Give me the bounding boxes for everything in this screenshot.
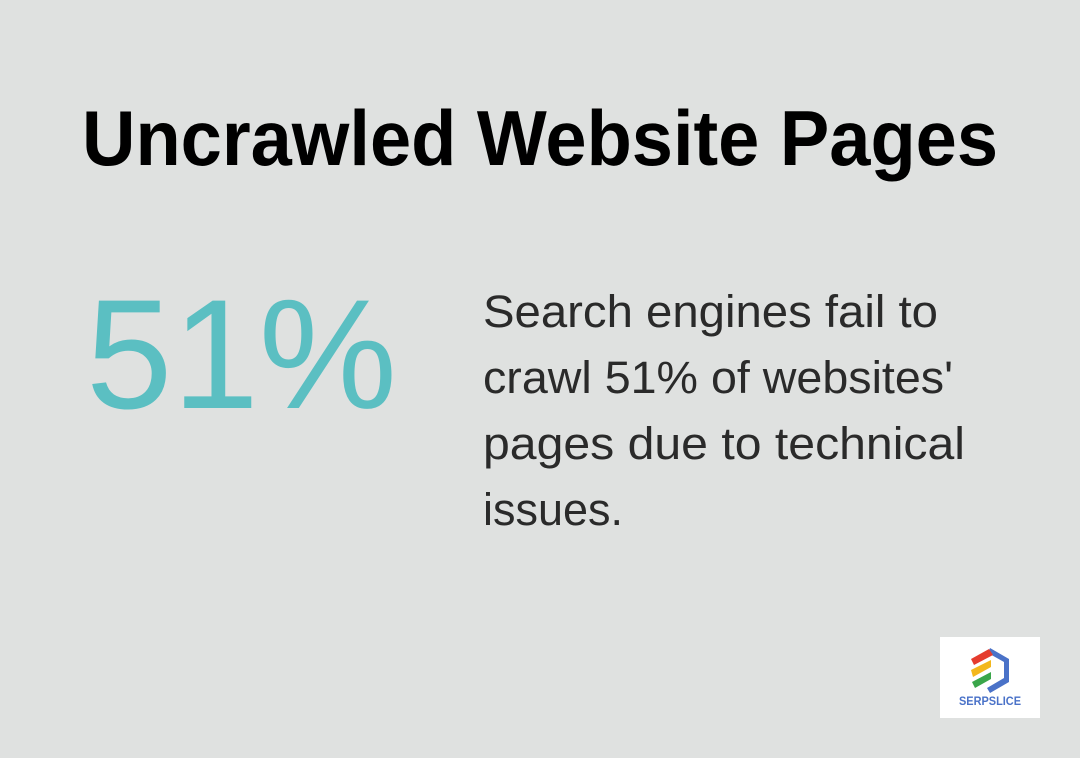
description text: pages due to technical — [483, 418, 965, 469]
title: Uncrawled Website Pages — [82, 94, 998, 182]
description text: issues. — [483, 484, 623, 535]
description text: crawl 51% of websites' — [483, 352, 953, 403]
description text — [483, 286, 965, 535]
big stat: 51% — [86, 268, 397, 442]
logo: serpslice — [940, 637, 1040, 718]
description text: Search engines fail to — [483, 286, 938, 337]
logo: serpslice: SERPSLICE — [959, 694, 1021, 708]
